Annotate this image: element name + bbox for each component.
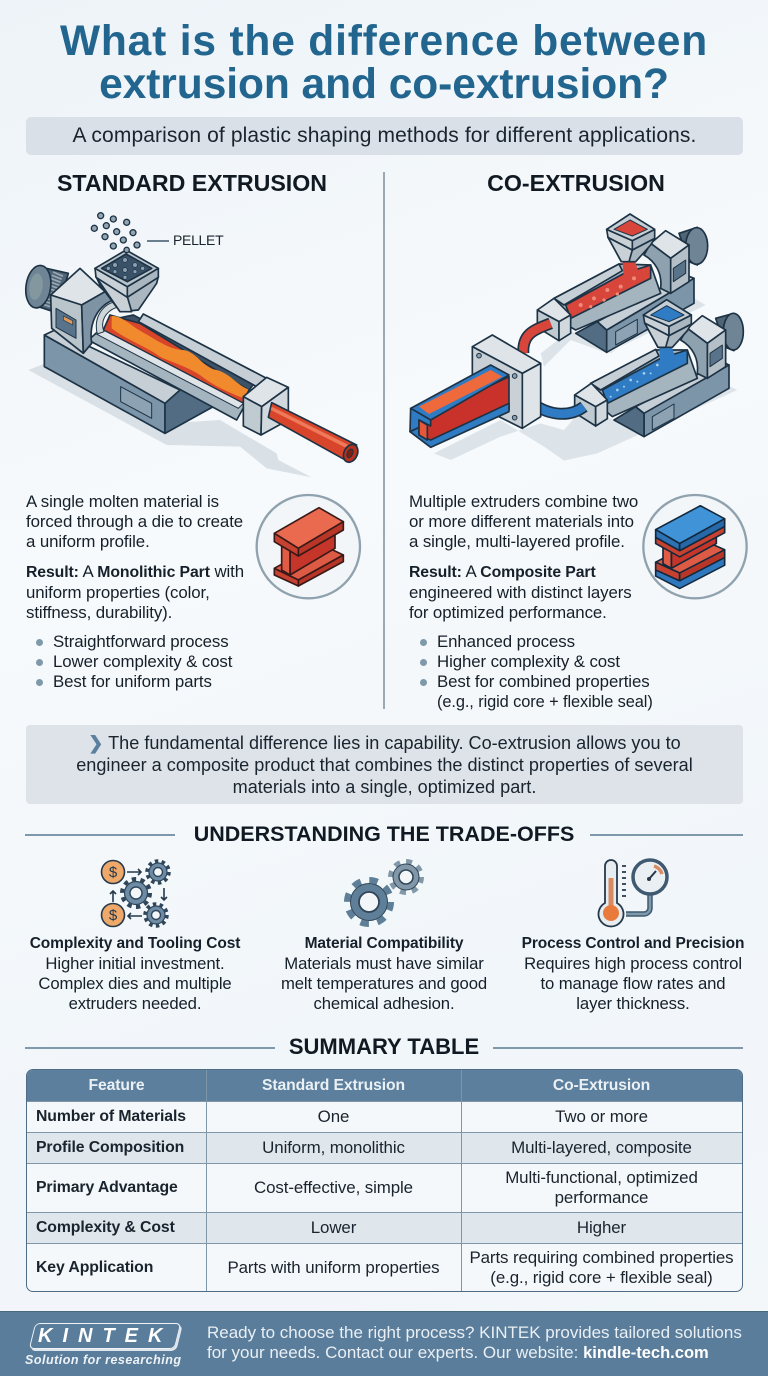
text: standard extrusion result: stiffness, durability).: [26, 603, 172, 622]
list: co-extrusion points: [420, 632, 653, 711]
list: standard extrusion points: Lower complexity & cost: [53, 652, 232, 671]
illustration: co-extrusion machines: [409, 213, 744, 460]
heading: standard extrusion: STANDARD EXTRUSION: [57, 170, 327, 196]
summary table: Two or more: [555, 1106, 648, 1126]
summary table: Profile Composition: [36, 1139, 184, 1156]
list: standard extrusion points: [36, 632, 232, 691]
summary table: Parts requiring combined properties: [469, 1248, 734, 1266]
text: complexity and tooling cost: Complex dies and multiple: [38, 974, 232, 993]
text: process control and precision: to manage flow rates and: [540, 974, 725, 993]
list: co-extrusion points: Best for combined properties: [437, 672, 650, 691]
text: complexity and tooling cost: Higher initial investment.: [45, 954, 225, 973]
title: [60, 18, 708, 108]
subtitle bar: A comparison of plastic shaping methods for different applications.: [72, 124, 696, 147]
label: pellet: PELLET: [173, 232, 223, 248]
text: standard extrusion description: forced through a die to create: [26, 512, 243, 531]
summary table: performance: [555, 1188, 648, 1206]
list: standard extrusion points: Best for uniform parts: [53, 672, 212, 691]
summary table: Parts with uniform properties: [227, 1258, 440, 1276]
summary table: Complexity & Cost: [36, 1219, 175, 1236]
list: co-extrusion points: (e.g., rigid core + flexible seal): [437, 693, 653, 711]
summary table: Primary Advantage: [36, 1179, 178, 1196]
text: co-extrusion description: or more different materials into: [409, 512, 634, 531]
icon: composite I-beam: [642, 494, 748, 600]
footer call to action: for your needs. Contact our experts. Our website: kindle-tech.com: [207, 1343, 709, 1362]
text: process control and precision: Requires high process control: [524, 954, 742, 973]
text: co-extrusion result: Result: A Composite Part: [409, 562, 596, 581]
icon: cost and tooling: $: [109, 907, 118, 924]
icon: gears: [344, 859, 424, 927]
text: material compatibility: chemical adhesion.: [313, 994, 455, 1013]
text: complexity and tooling cost: [30, 935, 240, 1013]
text: material compatibility: Materials must have similar: [284, 954, 484, 973]
callout: fundamental difference: engineer a composite product that combines the distinct properties of several: [76, 755, 693, 775]
text: process control and precision: layer thickness.: [576, 994, 690, 1013]
callout: fundamental difference: materials into a single, optimized part.: [233, 777, 536, 797]
icon: cost and tooling: [100, 859, 171, 928]
text: complexity and tooling cost: extruders needed.: [69, 994, 201, 1013]
summary table: Higher: [577, 1218, 626, 1236]
title: extrusion and co-extrusion?: [99, 61, 669, 108]
heading: understanding the trade-offs: UNDERSTANDING THE TRADE-OFFS: [194, 822, 574, 846]
list: standard extrusion points: Straightforward process: [53, 632, 229, 651]
text: standard extrusion description: a uniform profile.: [26, 532, 150, 551]
summary table: [26, 1069, 743, 1292]
text: complexity and tooling cost: Complexity and Tooling Cost: [30, 935, 240, 952]
text: standard extrusion description: A single molten material is: [26, 492, 219, 511]
summary table: Multi-layered, composite: [511, 1138, 692, 1156]
heading: co-extrusion: CO-EXTRUSION: [487, 170, 665, 196]
logo: KINTEK: KINTEK: [38, 1325, 172, 1347]
list: co-extrusion points: Enhanced process: [437, 632, 575, 651]
text: co-extrusion result: [409, 562, 632, 622]
logo: KINTEK: [25, 1323, 182, 1367]
text: co-extrusion result: engineered with distinct layers: [409, 583, 632, 602]
subtitle bar: [26, 117, 743, 155]
text: material compatibility: melt temperatures and good: [281, 974, 487, 993]
text: standard extrusion result: Result: A Monolithic Part with: [26, 562, 244, 581]
heading: summary table: SUMMARY TABLE: [289, 1034, 479, 1059]
summary table: Number of Materials: [36, 1108, 186, 1125]
text: co-extrusion description: a single, multi-layered profile.: [409, 532, 625, 551]
summary table: Feature: [89, 1076, 144, 1094]
summary table: One: [318, 1106, 349, 1126]
illustration: standard extruder machine: [24, 212, 359, 478]
summary table: Standard Extrusion: [262, 1076, 405, 1094]
text: process control and precision: Process Control and Precision: [522, 935, 744, 952]
summary table: Cost-effective, simple: [254, 1178, 413, 1196]
summary table: Co-Extrusion: [553, 1076, 650, 1094]
text: standard extrusion result: uniform properties (color,: [26, 583, 210, 602]
summary table: Multi-functional, optimized: [505, 1168, 698, 1186]
text: process control and precision: [522, 935, 744, 1013]
text: co-extrusion description: [409, 492, 638, 551]
icon: cost and tooling: $: [109, 864, 118, 881]
icon: monolithic I-beam: [256, 494, 362, 600]
summary table: Key Application: [36, 1259, 153, 1276]
list: co-extrusion points: Higher complexity & cost: [437, 652, 620, 671]
title: What is the difference between: [60, 18, 708, 65]
icon: thermometer and gauge: [598, 858, 669, 928]
callout: fundamental difference: ❯ The fundamental difference lies in capability. Co-extrusion allows you to: [88, 733, 681, 753]
summary table: (e.g., rigid core + flexible seal): [490, 1268, 713, 1286]
summary table: Lower: [311, 1218, 356, 1236]
footer call to action: [207, 1323, 742, 1362]
text: standard extrusion result: [26, 562, 244, 622]
text: co-extrusion result: for optimized performance.: [409, 603, 607, 622]
callout: fundamental difference: [26, 725, 743, 804]
text: standard extrusion description: [26, 492, 243, 551]
summary table: Uniform, monolithic: [262, 1138, 405, 1156]
text: material compatibility: Material Compatibility: [305, 935, 463, 952]
text: co-extrusion description: Multiple extruders combine two: [409, 492, 638, 511]
footer call to action: Ready to choose the right process? KINTEK provides tailored solutions: [207, 1323, 742, 1342]
text: material compatibility: [281, 935, 487, 1013]
footer band: [0, 1311, 768, 1376]
logo: KINTEK: Solution for researching: [25, 1353, 181, 1367]
